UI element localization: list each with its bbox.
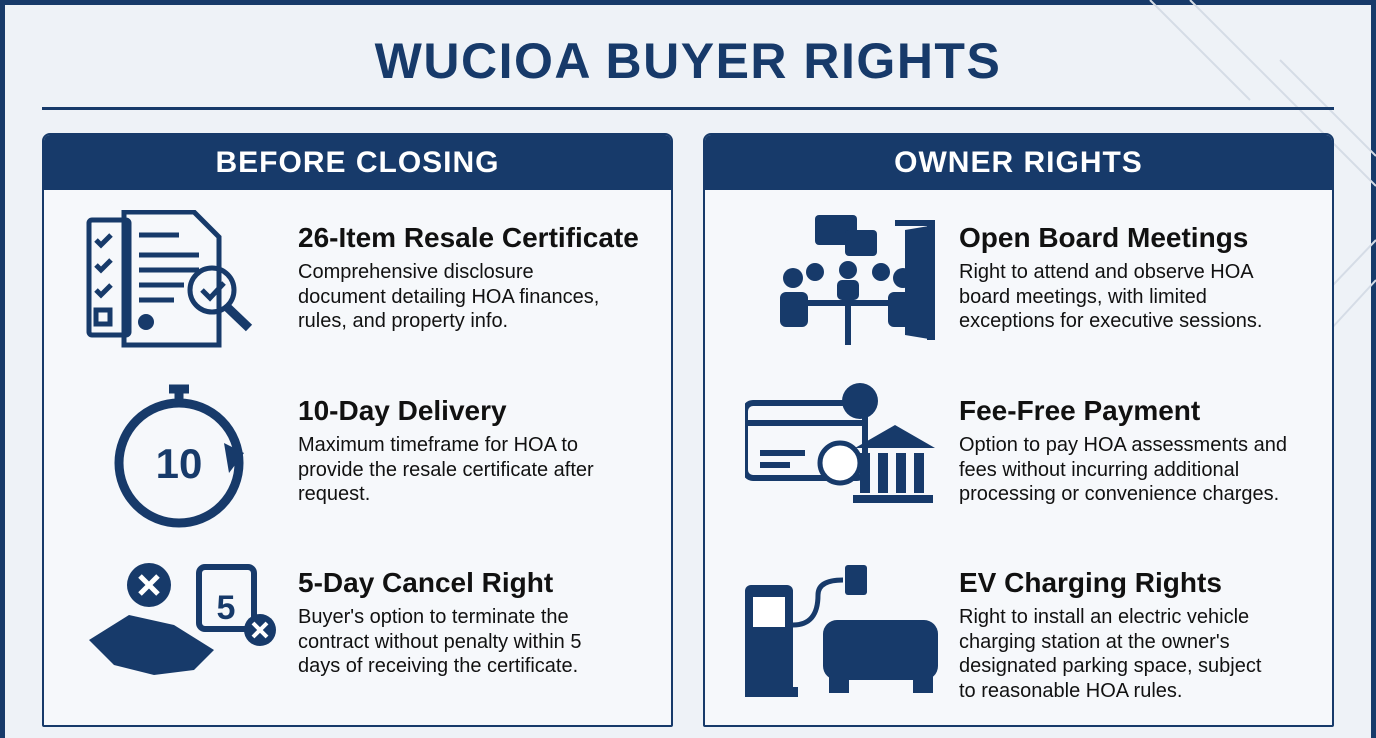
icon: meeting <box>780 215 935 345</box>
item: fee-free payment <box>745 383 1287 505</box>
item: EV charging: Right to install an electric vehicle charging station at the owner's designated parking space, subject to reasonable HOA rules. <box>959 606 1261 702</box>
icon: handshake and calendar: 5 <box>217 589 235 627</box>
panel heading: OWNER RIGHTS <box>894 146 1143 179</box>
title: WUCIOA BUYER RIGHTS <box>375 33 1001 89</box>
icon: document with magnifier <box>86 210 252 348</box>
item: EV charging: EV Charging Rights <box>959 567 1222 598</box>
item: fee-free payment: Option to pay HOA assessments and fees without incurring additional processing or convenience charges. <box>959 434 1287 505</box>
item: open board meetings: Open Board Meetings <box>959 222 1248 253</box>
icon: stopwatch: 10 <box>156 440 202 487</box>
item: cancel right <box>89 563 582 677</box>
item: resale certificate <box>86 210 639 348</box>
panel heading <box>705 135 1332 190</box>
item: open board meetings <box>780 215 1262 345</box>
item: cancel right: Buyer's option to terminate the contract without penalty within 5 days of receiving the certificate. <box>298 606 582 677</box>
icon: card and bank <box>745 383 935 503</box>
panel: owner rights <box>703 133 1334 727</box>
item: resale certificate: Comprehensive disclosure document detailing HOA finances, rules, and property info. <box>298 261 599 332</box>
icon: EV charger and car <box>745 565 938 697</box>
item: 10-day delivery: Maximum timeframe for HOA to provide the resale certificate after request. <box>298 434 594 505</box>
item: 10-day delivery <box>114 384 594 528</box>
item: fee-free payment: Fee-Free Payment <box>959 395 1200 426</box>
item: resale certificate: 26-Item Resale Certificate <box>298 222 639 253</box>
icon: handshake and calendar <box>89 563 276 675</box>
panel heading <box>44 135 671 190</box>
icon: stopwatch <box>114 384 244 528</box>
item: open board meetings: Right to attend and observe HOA board meetings, with limited exceptions for executive sessions. <box>959 261 1262 332</box>
panel heading: BEFORE CLOSING <box>215 146 500 179</box>
panel: before closing <box>42 133 673 727</box>
item: EV charging <box>745 565 1262 702</box>
item: cancel right: 5-Day Cancel Right <box>298 567 553 598</box>
item: 10-day delivery: 10-Day Delivery <box>298 395 507 426</box>
